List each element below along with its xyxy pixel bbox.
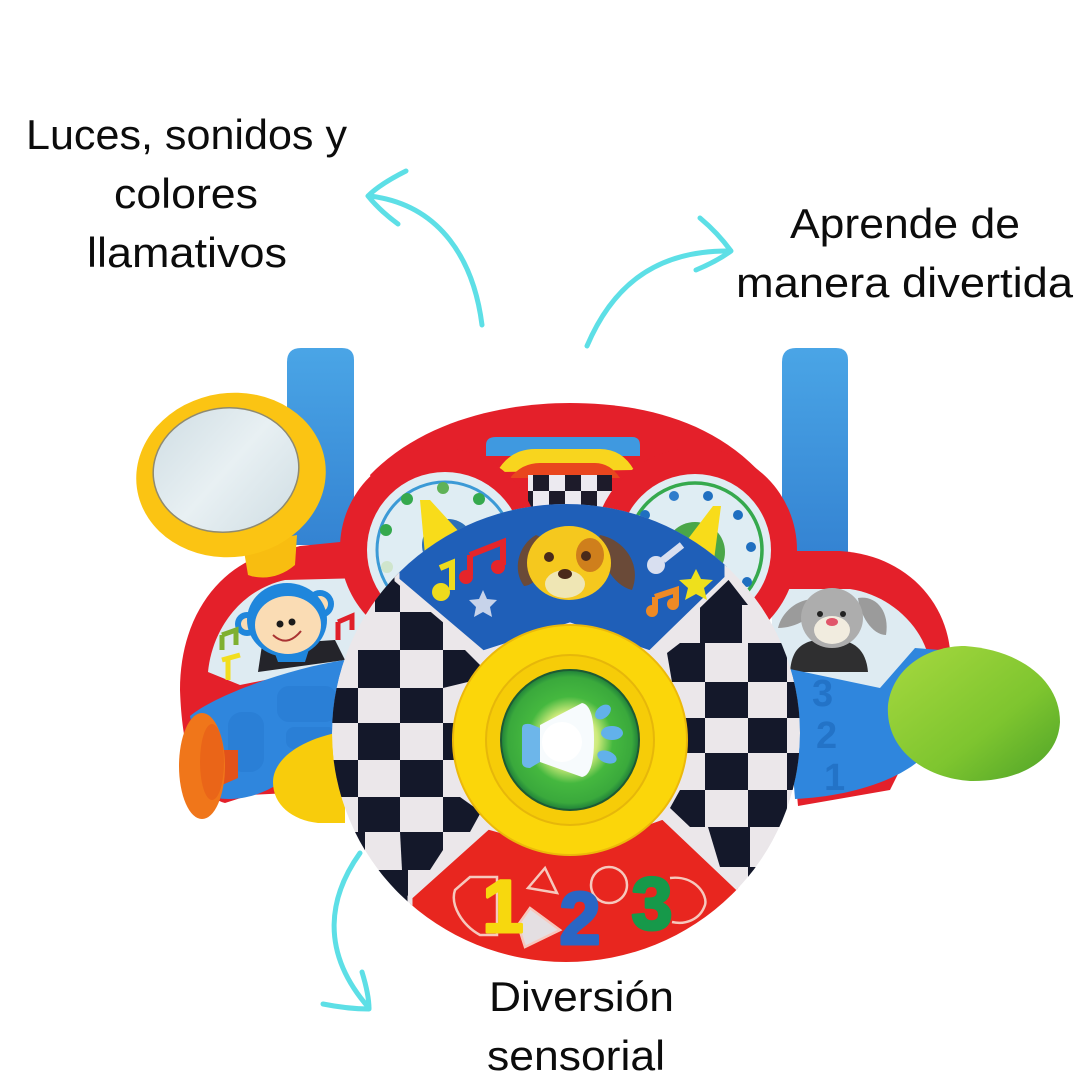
red bottom sector xyxy=(408,820,738,962)
arrow: towards aprende xyxy=(587,218,731,346)
label: diversión sensorial xyxy=(487,973,674,1079)
yellow ring xyxy=(453,625,687,855)
centre hub xyxy=(453,625,687,855)
label: luces, sonidos y colores: colores xyxy=(114,170,258,217)
arrow: towards luces xyxy=(368,171,482,325)
soft steering wheel xyxy=(332,504,800,962)
label: aprende de manera divertida xyxy=(736,200,1074,306)
checkered panel: right xyxy=(667,578,807,887)
right gauge xyxy=(593,448,797,652)
music notes and stars xyxy=(432,542,713,617)
blue top sector xyxy=(394,504,728,650)
yellow knob xyxy=(273,731,345,823)
left red shell xyxy=(180,541,370,803)
toy: baby steering wheel xyxy=(126,348,1060,990)
embossed numbers: 3 xyxy=(812,673,833,715)
label: luces, sonidos y colores: llamativos xyxy=(87,229,287,276)
orange knob xyxy=(179,713,238,819)
horn button with light xyxy=(501,670,639,810)
mirror xyxy=(126,381,336,578)
red housing xyxy=(370,403,765,560)
bunny character xyxy=(778,588,887,672)
strap: left blue xyxy=(287,348,354,545)
embossed numbers: 2 xyxy=(816,715,837,757)
embossed numbers: 1 xyxy=(824,757,845,799)
label: aprende de manera divertida: Aprende de xyxy=(790,200,1020,247)
chequered flag xyxy=(528,475,612,517)
arrow: towards diversión xyxy=(323,853,369,1009)
right red shell xyxy=(775,551,950,806)
numbers 1 2 3: 2 xyxy=(559,877,601,960)
label: diversión sensorial: sensorial xyxy=(487,1032,665,1079)
left blue base xyxy=(190,660,345,799)
right window xyxy=(772,589,928,690)
icon: horn xyxy=(522,702,623,777)
side panel: right xyxy=(772,551,1060,806)
embossed numbers xyxy=(812,673,845,799)
side panel: left xyxy=(180,541,370,803)
green shifter knob xyxy=(888,646,1060,781)
strap: right blue xyxy=(782,348,848,555)
right blue base xyxy=(785,648,940,799)
wheel base xyxy=(332,504,800,896)
label: luces, sonidos y colores xyxy=(26,111,347,276)
numbers 1 2 3: 1 xyxy=(482,865,524,948)
numbers 1 2 3: 3 xyxy=(631,862,673,945)
left window xyxy=(208,578,365,685)
left window notes xyxy=(222,616,352,680)
rainbow strip xyxy=(486,437,640,478)
label: diversión sensorial: Diversión xyxy=(489,973,674,1020)
puppy face xyxy=(518,526,635,600)
label: aprende de manera divertida: manera divertida xyxy=(736,259,1074,306)
left gauge xyxy=(340,448,540,648)
checkered panel: left xyxy=(325,570,481,902)
label: luces, sonidos y colores: Luces, sonidos y xyxy=(26,111,347,158)
dashboard xyxy=(340,403,797,652)
monkey character xyxy=(235,583,345,672)
numbers 1 2 3 xyxy=(452,866,707,949)
